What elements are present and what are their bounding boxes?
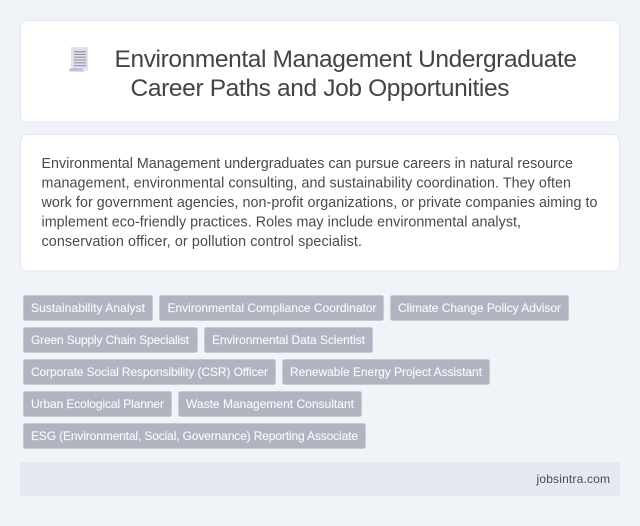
tag: ESG (Environmental, Social, Governance) Reporting Associate [31, 429, 358, 443]
tag: Urban Ecological Planner [31, 397, 164, 411]
tag: Green Supply Chain Specialist [31, 333, 190, 347]
title: Career Paths and Job Opportunities [130, 75, 510, 102]
tag: Climate Change Policy Advisor [398, 301, 561, 315]
job tags [24, 296, 568, 448]
description text: Environmental Management undergraduates can pursue careers in natural resource [42, 156, 573, 172]
tag: Corporate Social Responsibility (CSR) Officer [31, 365, 268, 379]
description text: work for government agencies, non-profit organizations, or private companies aiming to [40, 195, 598, 211]
panel: description [20, 134, 620, 271]
tag [24, 296, 152, 320]
tag: Sustainability Analyst [31, 301, 146, 315]
tag [178, 392, 362, 416]
description text: implement eco-friendly practices. Roles may include environmental analyst, [42, 214, 521, 230]
footer [20, 462, 620, 496]
tag [204, 328, 372, 352]
tag [24, 328, 198, 352]
description text: conservation officer, or pollution control specialist. [42, 234, 362, 250]
tag [390, 296, 568, 320]
tag: Renewable Energy Project Assistant [290, 365, 483, 379]
tag [282, 360, 490, 384]
panel: title header [20, 20, 620, 122]
tag: Environmental Data Scientist [212, 333, 366, 347]
description text: management, environmental consulting, and sustainability coordination. They often [42, 176, 571, 192]
description text [40, 156, 598, 250]
title [114, 46, 577, 102]
footer source text: jobsintra.com [536, 472, 610, 486]
title: Environmental Management Undergraduate [114, 46, 577, 73]
tag [24, 424, 366, 448]
tag: Environmental Compliance Coordinator [168, 301, 376, 315]
tag [160, 296, 384, 320]
tag [24, 360, 276, 384]
tag [24, 392, 172, 416]
tag: Waste Management Consultant [186, 397, 355, 411]
icon: document scroll [69, 47, 88, 72]
